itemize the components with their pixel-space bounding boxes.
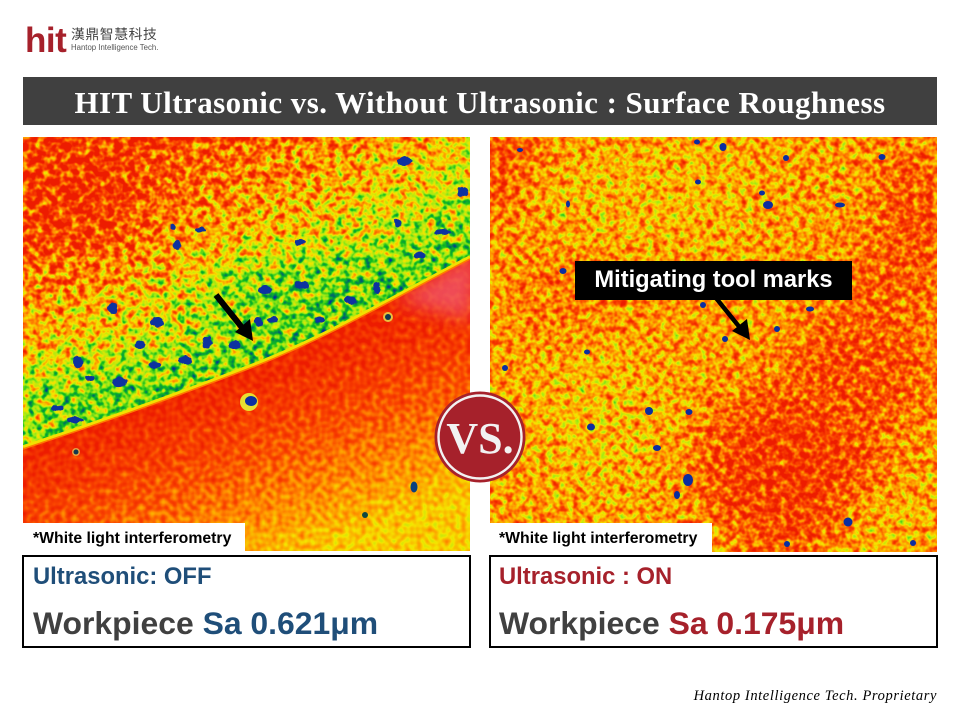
callout: mitigating tool marks: Mitigating tool marks bbox=[594, 267, 833, 293]
logo bbox=[25, 21, 158, 60]
heading: off: Ultrasonic: OFF bbox=[33, 563, 212, 590]
interferometry images bbox=[23, 137, 937, 552]
logo: 漢鼎智慧科技 bbox=[71, 27, 157, 42]
value: off: Workpiece Sa 0.621μm bbox=[33, 605, 378, 641]
caption left: *White light interferometry bbox=[33, 530, 231, 547]
vs badge: VS. bbox=[446, 414, 514, 463]
arrow: right image bbox=[716, 298, 750, 340]
callout: mitigating tool marks bbox=[575, 261, 852, 300]
left image: ultrasonic off surface map bbox=[23, 137, 470, 551]
caption right: *White light interferometry bbox=[499, 530, 697, 547]
pinkish band near the edge bbox=[394, 260, 470, 328]
caption left bbox=[23, 523, 245, 552]
logo: Hantop Intelligence Tech. bbox=[71, 43, 158, 52]
title bar: HIT Ultrasonic vs. Without Ultrasonic : Surface Roughness bbox=[74, 85, 886, 120]
value: on: Workpiece Sa 0.175μm bbox=[499, 605, 844, 641]
footer note: Hantop Intelligence Tech. Proprietary bbox=[694, 688, 937, 704]
vs badge bbox=[434, 392, 526, 482]
logo: hit bbox=[25, 21, 66, 60]
right image: ultrasonic on surface map bbox=[490, 137, 937, 552]
arrow: left image bbox=[216, 295, 253, 341]
heading: on: Ultrasonic : ON bbox=[499, 563, 672, 590]
caption right bbox=[490, 523, 712, 552]
panel: ultrasonic on bbox=[489, 555, 938, 648]
panel: ultrasonic off bbox=[22, 555, 471, 648]
title bar bbox=[23, 77, 937, 125]
bright edge bbox=[23, 257, 470, 447]
